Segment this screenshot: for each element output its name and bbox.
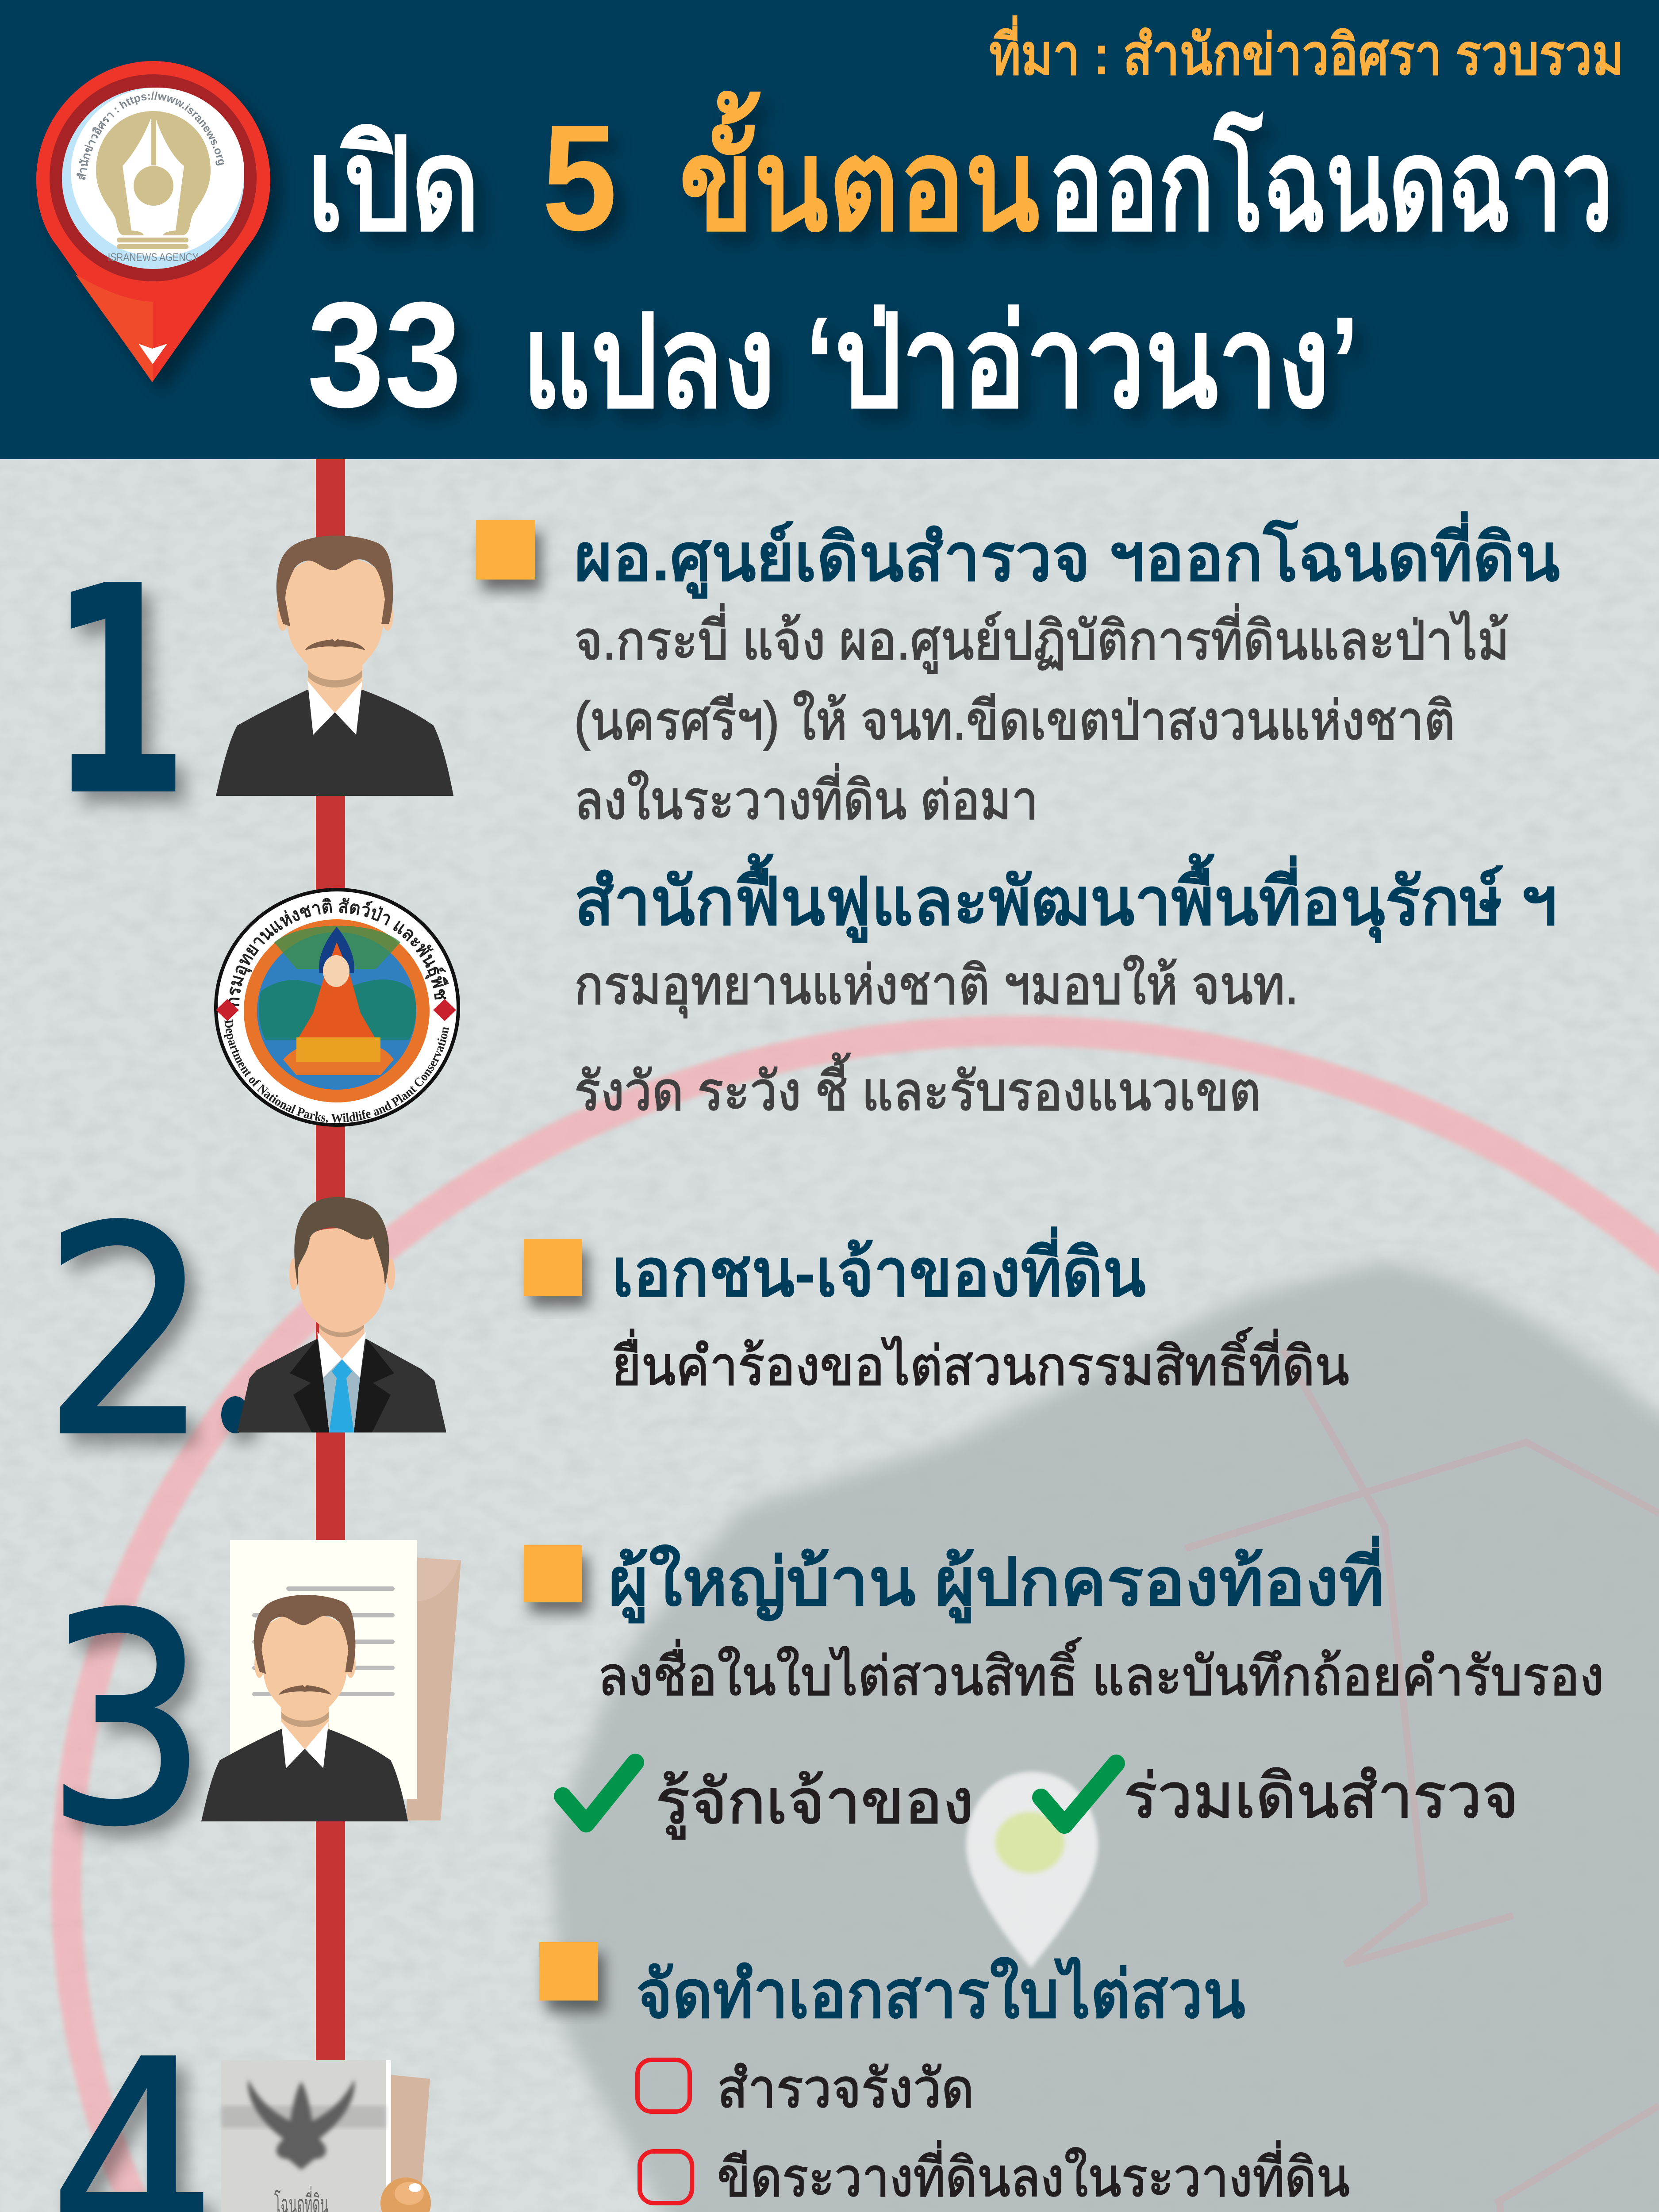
check icon 2 <box>1041 1763 1116 1825</box>
step 2 text: ยื่นคำร้องขอไต่สวนกรรมสิทธิ์ที่ดิน <box>612 1327 1349 1396</box>
logo pin: Isranews <box>36 61 270 382</box>
map parcel lines <box>929 1349 1659 2212</box>
title line 1: เปิด <box>307 113 480 257</box>
square bullet: step 2 <box>524 1239 582 1296</box>
title line 2 <box>307 271 1359 439</box>
step 1 emblem: Department of National Parks: กรมอุทยานแห่งชาติ สัตว์ป่า และพันธุ์พืช <box>222 896 452 1008</box>
title line 1: 5 <box>542 94 617 262</box>
square bullet: step 3 <box>524 1545 582 1602</box>
step 1 paragraph 2: รังวัด ระวัง ชี้ และรับรองแนวเขต <box>574 1052 1261 1121</box>
checklist box 1 <box>637 2060 690 2112</box>
step 1 heading: ผอ.ศูนย์เดินสำรวจ ฯออกโฉนดที่ดิน <box>574 511 1560 599</box>
step 1 emblem: Department of National Parks <box>216 890 458 1125</box>
step 1 icon: official with moustache <box>216 535 453 796</box>
step 1 paragraph <box>574 603 1509 830</box>
step 1 paragraph: (นครศรีฯ) ให้ จนท.ขีดเขตป่าสงวนแห่งชาติ <box>574 691 1455 751</box>
header band <box>0 0 1659 459</box>
step 1 sub-heading: สำนักฟื้นฟูและพัฒนาพื้นที่อนุรักษ์ ฯ <box>574 853 1557 943</box>
title line 1: ขั้นตอน <box>679 90 1040 257</box>
step 1 paragraph: ลงในระวางที่ดิน ต่อมา <box>574 763 1038 830</box>
step 1 number: 1 <box>48 525 189 860</box>
step 4 heading: จัดทำเอกสารใบไต่สวน <box>636 1957 1245 2032</box>
step 4 icon: land deed and stamp <box>221 2060 461 2212</box>
square bullet: step 1 <box>476 520 535 580</box>
checklist text 2: ขีดระวางที่ดินลงในระวางที่ดิน <box>717 2140 1350 2208</box>
step 2 heading: เอกชน-เจ้าของที่ดิน <box>612 1226 1146 1310</box>
step 1 paragraph 2 <box>574 955 1298 1121</box>
checklist text 1: สำรวจรังวัด <box>717 2058 974 2119</box>
title line 2: 33 <box>307 271 462 439</box>
checklist box 2 <box>640 2151 692 2203</box>
title line 2: แปลง ‘ป่าอ่าวนาง’ <box>522 290 1359 434</box>
step 1 emblem: Department of National Parks: Department of National Parks, Wildlife and Plant Conservation <box>221 1019 452 1125</box>
step 3 icon: document and village head <box>201 1540 461 1821</box>
faint white map pin <box>966 1772 1098 1968</box>
step 3 number: 3 <box>46 1554 208 1889</box>
title line 1 <box>307 90 1613 262</box>
pink ring <box>66 1031 1659 2212</box>
step 1 paragraph 2: กรมอุทยานแห่งชาติ ฯมอบให้ จนท. <box>574 955 1298 1018</box>
check label 2: ร่วมเดินสำรวจ <box>1124 1761 1519 1831</box>
timeline red line <box>316 459 345 2212</box>
step 2 icon: land owner in suit with blue tie <box>237 1197 446 1432</box>
background: aerial map photo <box>0 459 1659 2212</box>
step 1 paragraph: จ.กระบี่ แจ้ง ผอ.ศูนย์ปฏิบัติการที่ดินและป่าไม้ <box>574 603 1509 673</box>
step 2 number: 2 <box>42 1167 211 1499</box>
square bullet: step 4 <box>539 1942 598 2001</box>
logo pin: Isranews: ISRANEWS AGENCY <box>108 251 199 264</box>
logo pin: Isranews: สำนักข่าวอิศรา : https://www.isranews.org <box>75 90 228 181</box>
check label 1: รู้จักเจ้าของ <box>656 1767 974 1839</box>
step 3 text: ลงชื่อในใบไต่สวนสิทธิ์ และบันทึกถ้อยคำรับรอง <box>598 1637 1604 1706</box>
step 3 heading: ผู้ใหญ่บ้าน ผู้ปกครองท้องที่ <box>608 1536 1384 1624</box>
check icon 1 <box>563 1763 635 1824</box>
